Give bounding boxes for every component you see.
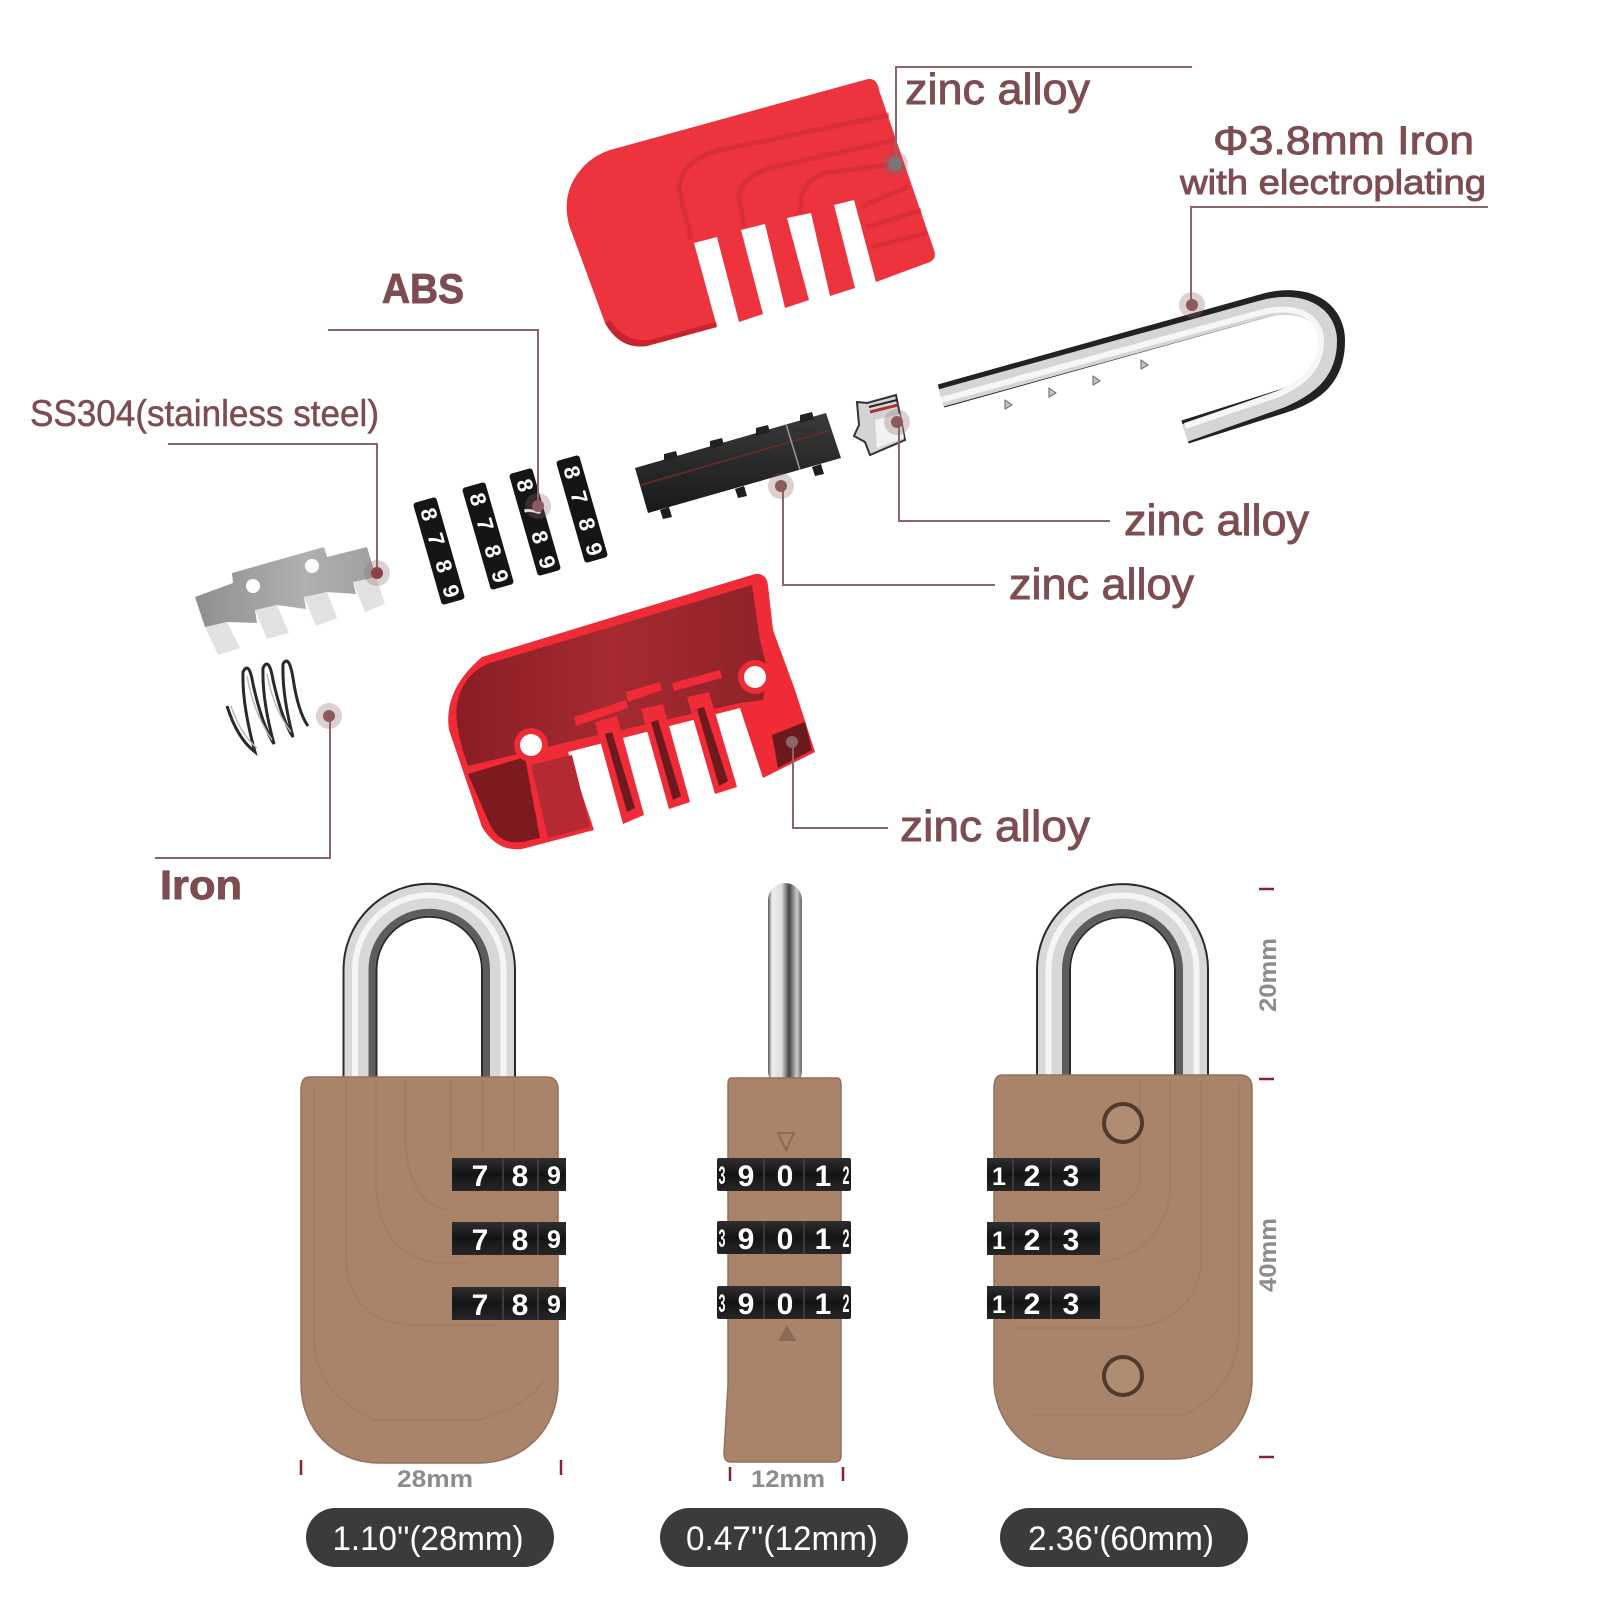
callout: shackle material: Φ3.8mm Iron <box>1213 119 1474 163</box>
front wheel 1: 8 <box>512 1160 528 1193</box>
front shackle <box>355 895 504 1085</box>
digit wheel 1: 8 <box>415 505 443 524</box>
callout: iron spring: Iron <box>160 862 242 908</box>
digit wheel 2: 9 <box>486 567 514 586</box>
callout: iron spring <box>155 703 342 908</box>
dimension: height ticks and labels: 40mm <box>1255 1218 1282 1292</box>
side wheel 1: 3 <box>719 1162 725 1190</box>
dimension: height ticks and labels <box>1255 889 1282 1457</box>
digit wheel 2 <box>462 481 515 590</box>
cover compartment <box>772 722 812 768</box>
cover slot tooth 2 <box>641 704 690 809</box>
front wheel 1: 9 <box>547 1162 561 1190</box>
callout: zinc alloy top cover <box>882 65 1192 177</box>
callout: shackle material <box>1179 119 1488 318</box>
callout: zinc alloy top cover: zinc alloy <box>905 65 1090 114</box>
side wheel 3: 1 <box>815 1288 831 1321</box>
back wheel 2: 1 <box>992 1227 1006 1255</box>
triangle down <box>778 1133 794 1150</box>
digit wheel 1: 7 <box>422 530 450 549</box>
side body <box>724 1078 841 1462</box>
back shackle <box>1048 896 1196 1085</box>
pill: depth <box>660 1508 908 1567</box>
triangle up <box>778 1325 796 1341</box>
panel: spring <box>227 661 308 752</box>
callout: zinc gear <box>884 409 1309 545</box>
side wheel 2: 0 <box>777 1223 793 1256</box>
side wheel 2 <box>717 1221 851 1256</box>
callout: stainless steel plate: SS304(stainless steel) <box>30 393 379 434</box>
panel: silver J-shaped shackle part <box>941 302 1333 433</box>
panel: side view lock <box>717 883 851 1462</box>
panel: back view lock <box>987 896 1252 1459</box>
digit wheel 3: 8 <box>526 528 554 547</box>
digit wheel 3: 8 <box>511 476 539 495</box>
side wheel 2: 2 <box>843 1225 849 1253</box>
side wheel 3: 0 <box>777 1288 793 1321</box>
digit wheel 2: 7 <box>471 515 499 534</box>
back screw bottom <box>1104 1357 1142 1395</box>
back wheel 1: 3 <box>1063 1160 1079 1193</box>
side wheel 3 <box>717 1286 851 1321</box>
front wheel 3: 8 <box>512 1289 528 1322</box>
side wheel 2: 1 <box>815 1223 831 1256</box>
callout: ABS wheels: ABS <box>382 265 464 312</box>
digit wheel 3: 7 <box>518 501 546 520</box>
front wheel 2 <box>452 1222 566 1257</box>
side wheel 3: 9 <box>738 1288 754 1321</box>
digit wheel 1 <box>413 496 466 605</box>
callout: zinc bottom cover: zinc alloy <box>900 802 1090 851</box>
dimension: height ticks and labels: 20mm <box>1255 938 1282 1012</box>
callout: ABS wheels <box>328 265 551 519</box>
front body <box>301 1077 558 1463</box>
front wheel 3: 7 <box>472 1289 488 1322</box>
pill: width: 1.10''(28mm) <box>332 1520 524 1558</box>
side wheel 1: 1 <box>815 1160 831 1193</box>
side shackle <box>768 883 802 1088</box>
pill: height <box>1000 1508 1248 1567</box>
back wheel 1: 1 <box>992 1163 1006 1191</box>
digit wheel 4: 7 <box>565 488 593 507</box>
front wheel 2: 7 <box>472 1224 488 1257</box>
pill: depth: 0.47''(12mm) <box>686 1520 878 1558</box>
back wheel 1 <box>987 1158 1100 1193</box>
side wheel 2: 3 <box>719 1225 725 1253</box>
dimension: depth 12mm: 12mm <box>751 1466 825 1493</box>
pill: height: 2.36'(60mm) <box>1028 1520 1214 1558</box>
pill: width <box>306 1508 554 1567</box>
back wheel 1: 2 <box>1024 1160 1040 1193</box>
dimension: width 28mm <box>301 1460 561 1493</box>
front wheel 2: 8 <box>512 1224 528 1257</box>
icon: shackle notch pegs <box>1005 360 1148 409</box>
panel: black cylinder part <box>635 412 841 519</box>
panel: front view lock <box>301 895 566 1463</box>
panel: digit wheels exploded <box>413 454 609 605</box>
back wheel 2: 3 <box>1063 1224 1079 1257</box>
front wheel 2: 9 <box>547 1226 561 1254</box>
cover slot tooth 3 <box>687 692 737 794</box>
callout: stainless steel plate <box>30 393 390 586</box>
digit wheel 4: 8 <box>558 463 586 482</box>
dimension: width 28mm: 28mm <box>397 1466 473 1493</box>
digit wheel 3: 9 <box>533 553 561 572</box>
cover slot tooth 1 <box>595 716 644 824</box>
dimension: depth 12mm <box>730 1466 843 1493</box>
back wheel 3: 3 <box>1063 1288 1079 1321</box>
digit wheel 4: 8 <box>573 515 601 534</box>
back wheel 3: 1 <box>992 1291 1006 1319</box>
callout: zinc gear: zinc alloy <box>1124 496 1309 545</box>
digit wheel 2: 8 <box>479 542 507 561</box>
digit wheel 4: 9 <box>580 540 608 559</box>
digit wheel 1: 8 <box>430 557 458 576</box>
front wheel 3 <box>452 1287 566 1322</box>
digit wheel 3 <box>509 467 562 576</box>
back wheel 2 <box>987 1222 1100 1257</box>
callout: zinc cylinder: zinc alloy <box>1009 560 1194 609</box>
side wheel 1: 0 <box>777 1160 793 1193</box>
digit wheel 2: 8 <box>464 490 492 509</box>
side wheel 3: 3 <box>719 1290 725 1318</box>
panel: exploded red top cover <box>567 79 935 347</box>
digit wheel 4 <box>556 454 609 563</box>
side wheel 1: 2 <box>843 1162 849 1190</box>
panel: exploded red bottom cover <box>448 574 815 849</box>
back screw top <box>1104 1104 1142 1142</box>
side wheel 2: 9 <box>738 1223 754 1256</box>
digit wheel 1: 9 <box>437 582 465 601</box>
callout: zinc cylinder <box>768 473 1194 609</box>
panel: zinc gear part <box>854 395 905 455</box>
side wheel 1: 9 <box>738 1160 754 1193</box>
front wheel 3: 9 <box>547 1291 561 1319</box>
back wheel 3 <box>987 1286 1100 1321</box>
callout: zinc bottom cover <box>786 736 1090 851</box>
front wheel 1: 7 <box>472 1160 488 1193</box>
front wheel 1 <box>452 1158 566 1193</box>
back wheel 3: 2 <box>1024 1288 1040 1321</box>
panel: stainless steel plate <box>195 547 385 655</box>
back wheel 2: 2 <box>1024 1224 1040 1257</box>
side wheel 3: 2 <box>843 1290 849 1318</box>
side wheel 1 <box>717 1158 851 1193</box>
back body <box>994 1075 1252 1459</box>
callout: shackle material: with electroplating <box>1179 164 1486 202</box>
